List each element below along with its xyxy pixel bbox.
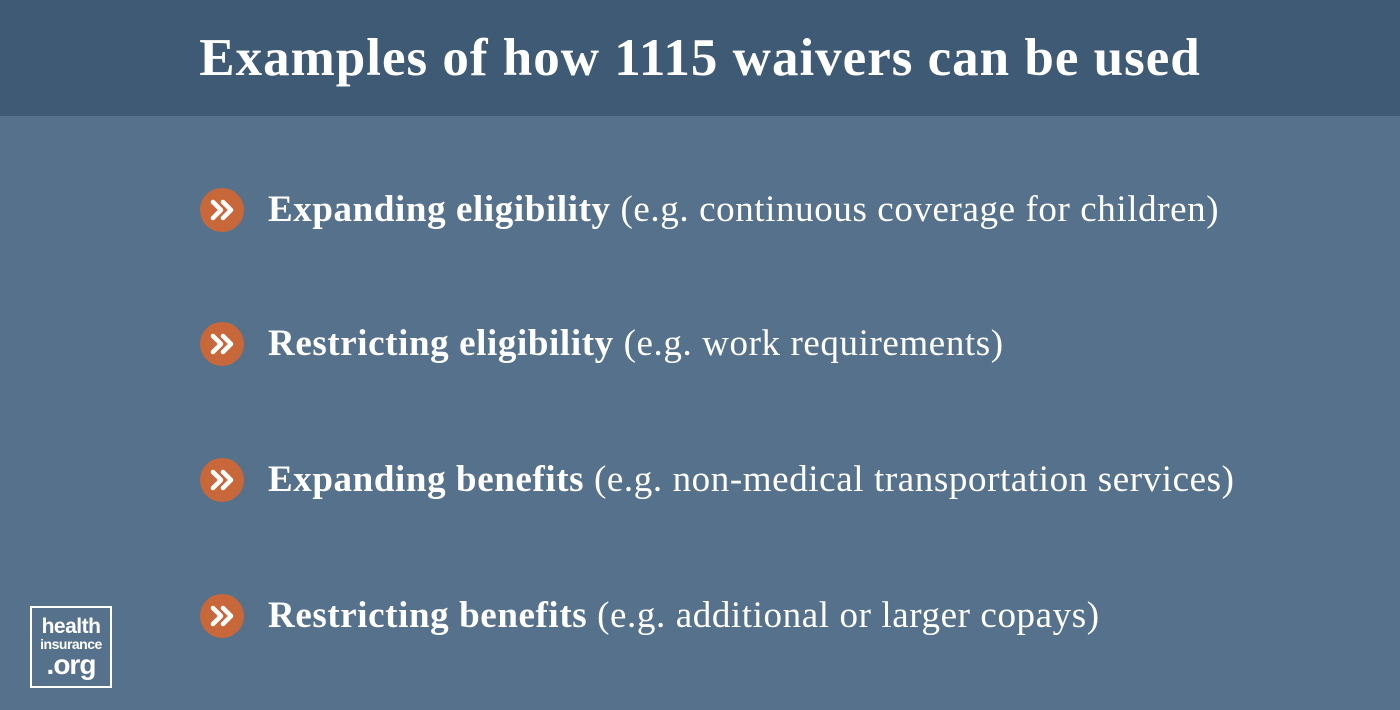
logo: insurance — [40, 636, 102, 652]
item 1 — [200, 188, 1219, 232]
text: Restricting eligibility (e.g. work requirements) — [268, 323, 1004, 364]
title: Examples of how 1115 waivers can be used — [199, 29, 1201, 87]
logo — [30, 606, 112, 688]
icon: orange chevrons — [200, 458, 244, 502]
item 2 — [200, 322, 1004, 366]
text: Restricting benefits (e.g. additional or larger copays) — [268, 595, 1100, 636]
item 3 — [200, 458, 1235, 502]
logo: health — [42, 615, 100, 638]
item 4 — [200, 594, 1100, 638]
header band — [0, 0, 1400, 116]
text: Expanding benefits (e.g. non-medical transportation services) — [268, 459, 1235, 500]
text: Expanding eligibility (e.g. continuous coverage for children) — [268, 189, 1219, 230]
logo: .org — [47, 649, 95, 680]
icon: orange chevrons — [200, 594, 244, 638]
icon: orange chevrons — [200, 188, 244, 232]
icon: orange chevrons — [200, 322, 244, 366]
